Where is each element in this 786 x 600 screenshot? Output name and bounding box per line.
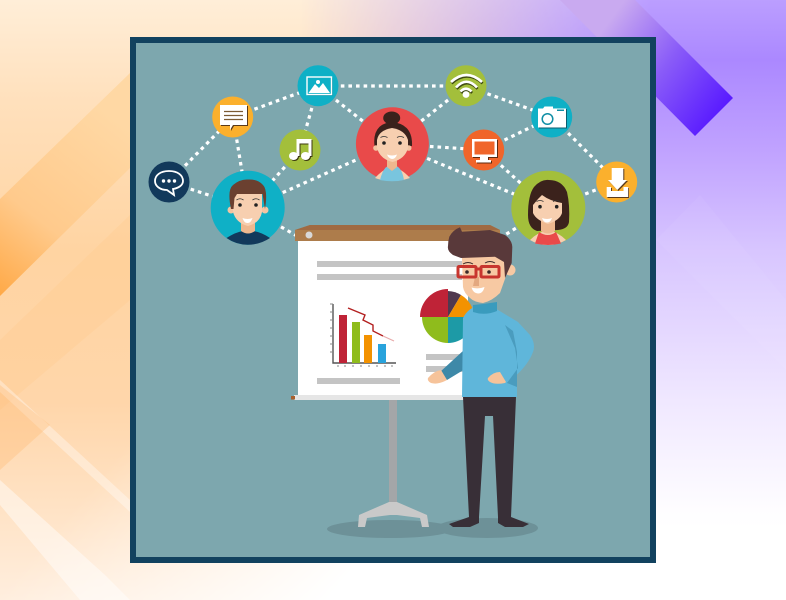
bar chart <box>330 304 396 367</box>
avatar: man <box>211 171 285 245</box>
smile <box>472 287 484 294</box>
far arm and hand <box>440 350 470 380</box>
node: monitor <box>463 130 504 170</box>
hair <box>448 227 512 278</box>
avatar: woman with bun <box>356 107 429 181</box>
node: wifi <box>446 65 486 106</box>
brows, eyes and nose <box>463 262 495 264</box>
node: image <box>298 65 338 106</box>
easel stand <box>358 400 429 527</box>
floor shadows <box>327 518 538 538</box>
pie chart <box>420 289 474 343</box>
frame panel <box>133 40 653 560</box>
torso and near arm <box>462 306 534 397</box>
presenter <box>428 227 534 527</box>
red glasses <box>458 266 499 277</box>
node: download <box>596 162 637 202</box>
node: message <box>212 96 253 138</box>
node: chat <box>148 162 190 202</box>
dotted network lines <box>169 86 617 240</box>
presentation board <box>291 225 500 400</box>
legs and shoes <box>449 397 529 527</box>
avatar: woman with long hair <box>511 171 585 245</box>
node: camera <box>531 96 572 138</box>
collar <box>473 302 497 314</box>
face and ear <box>462 250 506 303</box>
text placeholder bars <box>317 261 464 384</box>
node: music <box>280 130 320 170</box>
